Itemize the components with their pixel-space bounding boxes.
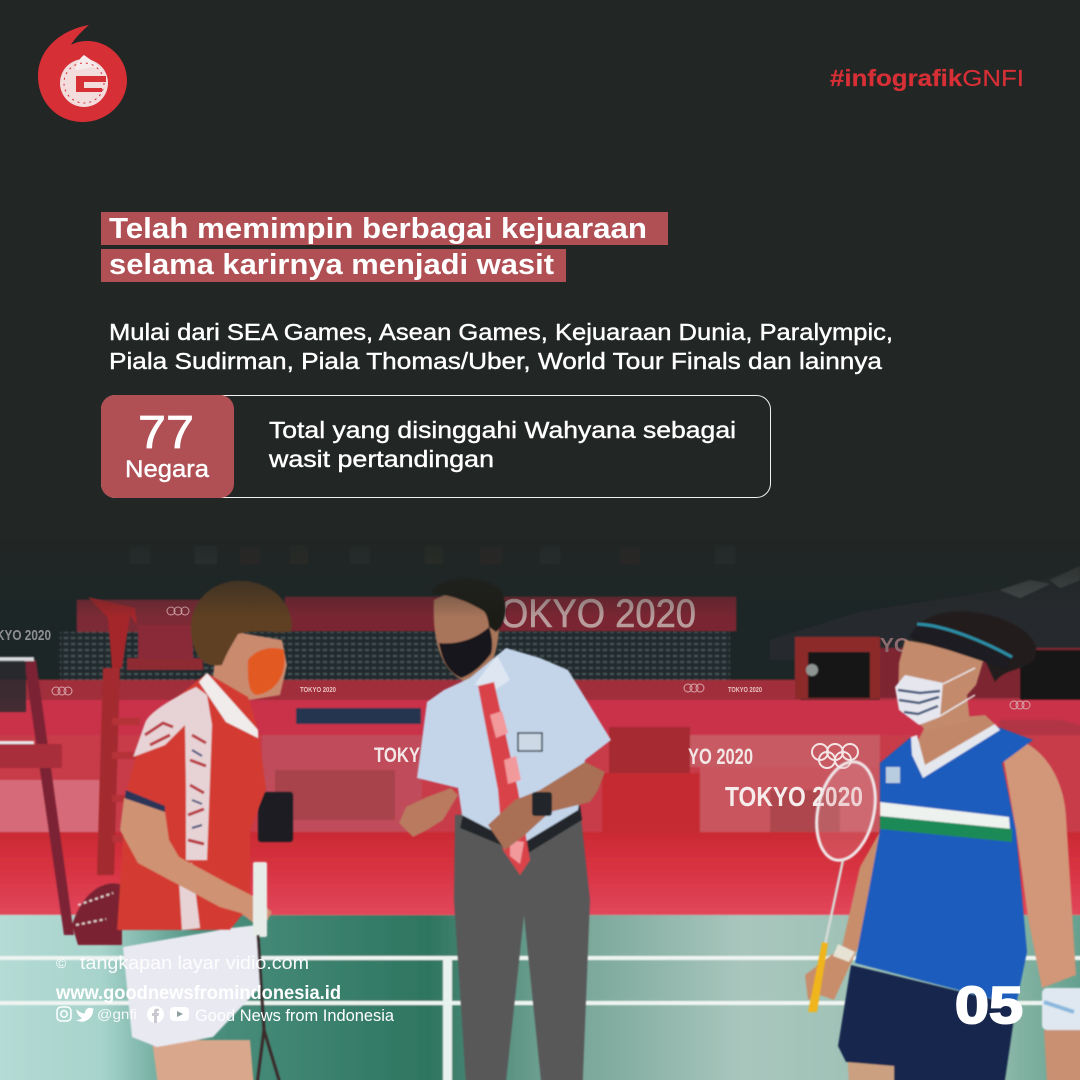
page name: Good News from Indonesia — [195, 1006, 395, 1025]
page number: 05 — [955, 977, 1023, 1035]
text block: list of championships: Piala Sudirman, Piala Thomas/Uber, World Tour Finals dan lainnya — [109, 348, 882, 374]
heading: Telah memimpin berbagai kejuaraan — [101, 212, 668, 282]
photo credit: tangkapan layar vidio.com — [80, 953, 309, 973]
callout text — [268, 417, 736, 472]
arena signage: Tokyo 2020: TOKYO 2020 — [728, 687, 762, 694]
heading: Telah memimpin berbagai kejuaraan: selama karirnya menjadi wasit — [109, 249, 554, 281]
left player in red jersey with mask — [117, 581, 292, 1080]
arena signage: Tokyo 2020: TOKY — [374, 744, 420, 767]
right player in blue jersey with headband — [805, 611, 1080, 1080]
photo top fade — [0, 528, 1080, 618]
arena signage: Tokyo 2020: YO — [880, 635, 910, 657]
icon: twitter — [76, 1008, 94, 1022]
website url: www.goodnewsfromindonesia.id — [55, 983, 341, 1004]
stat badge — [101, 395, 234, 498]
text block: list of championships — [109, 319, 893, 374]
arena signage: Tokyo 2020: TOKYO 2020 — [300, 687, 336, 694]
stat badge: 77 — [138, 406, 194, 458]
photo: referee between two badminton players at Tokyo 2020 — [0, 528, 1080, 1080]
badminton racket with yellow grip — [808, 756, 884, 1012]
arena signage: Tokyo 2020 — [0, 592, 1030, 812]
arena signage: Tokyo 2020: OKYO 2020 — [500, 592, 696, 636]
icon: youtube — [170, 1007, 189, 1021]
heading: Telah memimpin berbagai kejuaraan: Telah memimpin berbagai kejuaraan — [109, 213, 647, 245]
umpire chair and net post — [0, 597, 293, 945]
text block: list of championships: Mulai dari SEA Games, Asean Games, Kejuaraan Dunia, Paralympic, — [109, 319, 893, 345]
arena signage: Tokyo 2020: YO 2020 — [688, 744, 753, 769]
arena signage: Tokyo 2020: TOKYO 2020 — [725, 781, 863, 812]
callout: 77 Negara — [101, 395, 770, 498]
hashtag: #infografikGNFI: #infografik GNFI — [830, 65, 1024, 91]
handle: @gnfi — [97, 1006, 137, 1022]
arena background — [0, 530, 1080, 1080]
icon: instagram — [57, 1007, 71, 1021]
logo: GNFI — [38, 25, 127, 122]
callout text: wasit pertandingan — [268, 446, 494, 472]
referee with black mask and red tie — [399, 578, 611, 1080]
icon: facebook — [147, 1006, 164, 1023]
stat badge: Negara — [125, 456, 210, 483]
social media row — [57, 1006, 395, 1025]
photo credit: © — [56, 955, 67, 971]
callout text: Total yang disinggahi Wahyana sebagai — [269, 417, 736, 443]
